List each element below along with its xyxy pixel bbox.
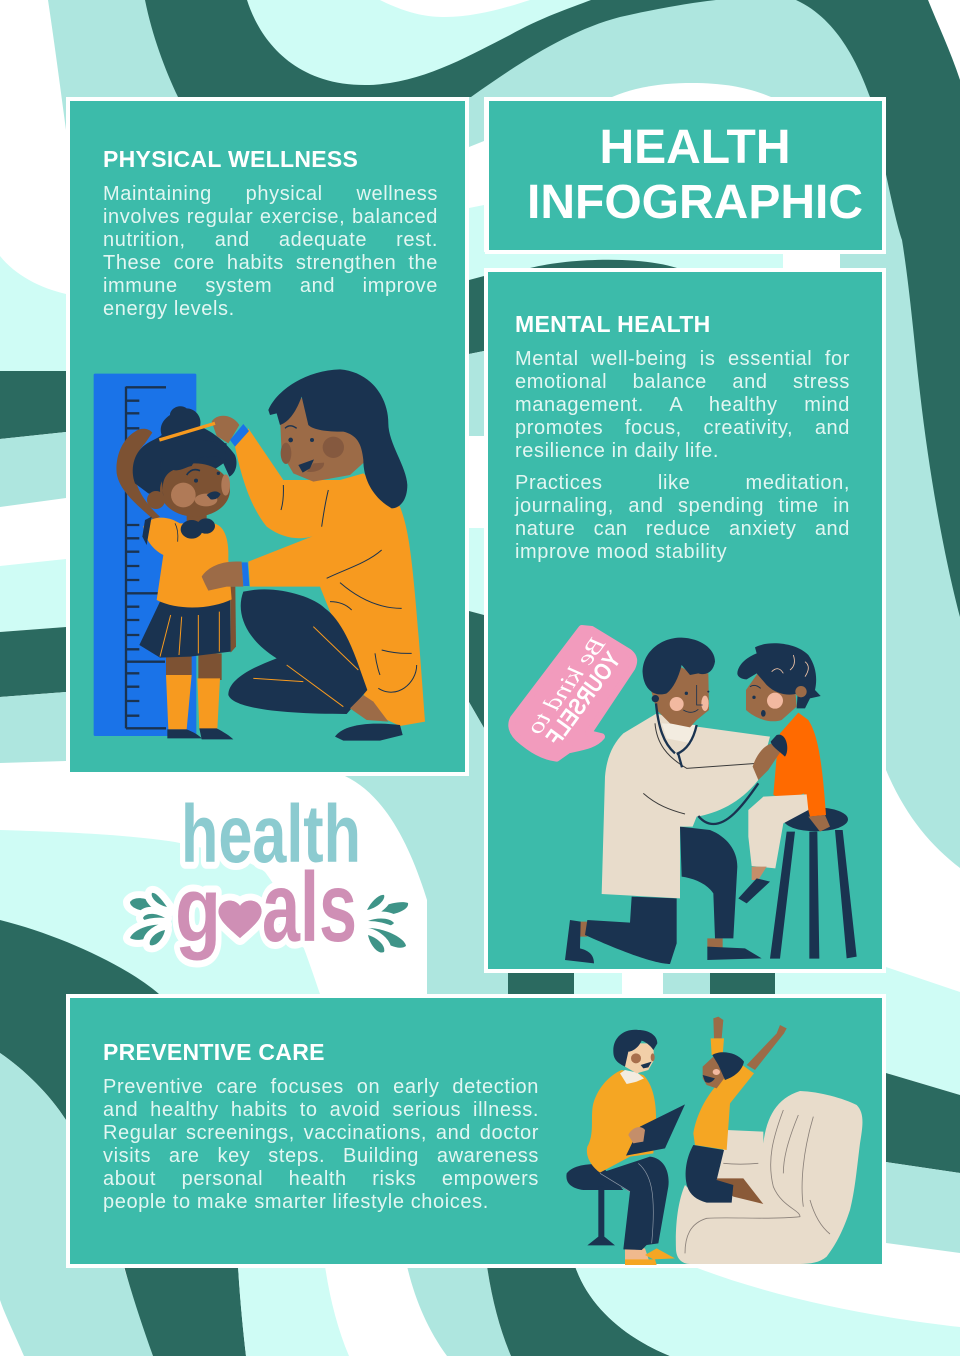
heading: preventive care: PREVENTIVE CARE	[103, 1039, 325, 1065]
panel: preventive care	[66, 994, 886, 1268]
text: physical wellness body: nutrition, and adequate rest.	[103, 229, 438, 251]
heading: physical wellness: PHYSICAL WELLNESS	[103, 146, 358, 172]
heading: mental health: MENTAL HEALTH	[515, 311, 711, 337]
text: mental health paragraph two: nature can reduce anxiety and	[515, 518, 850, 540]
text: physical wellness body: energy levels.	[103, 298, 235, 320]
text: mental health paragraph two	[514, 472, 850, 563]
speech bubble: YOURSELF	[541, 647, 627, 751]
logo: health goals	[130, 789, 408, 962]
text: mental health paragraph two: journaling, and spending time in	[515, 495, 850, 517]
panel: physical wellness	[66, 97, 469, 776]
text: preventive care body: and healthy habits to avoid serious illness.	[103, 1099, 539, 1121]
logo: health goals: health	[181, 789, 361, 880]
text: preventive care body	[103, 1076, 539, 1213]
illustration: counsellor with jumping child on a couch	[566, 1017, 862, 1265]
text: preventive care body: Regular screenings, vaccinations, and doctor	[103, 1122, 539, 1144]
text: physical wellness body: involves regular exercise, balanced	[103, 206, 438, 228]
title: HEALTH	[599, 121, 791, 174]
text: mental health paragraph one: resilience in daily life.	[515, 440, 719, 462]
text: mental health paragraph one: promotes focus, creativity, and	[515, 417, 850, 439]
text: mental health paragraph one	[515, 348, 850, 462]
illustration: doctor examining a child	[512, 628, 857, 964]
text: preventive care body: visits are key steps. Building awareness	[103, 1145, 539, 1167]
logo: health goals: g	[175, 859, 221, 961]
panel: mental health	[484, 268, 886, 973]
panel: title	[485, 97, 886, 254]
title: INFOGRAPHIC	[527, 176, 863, 229]
text: physical wellness body: immune system and improve	[103, 275, 438, 297]
text: physical wellness body	[103, 183, 438, 320]
speech bubble	[512, 628, 634, 758]
text: mental health paragraph one: management. A healthy mind	[515, 394, 850, 416]
illustration: woman measuring a child's height	[94, 369, 425, 741]
text: physical wellness body: Maintaining physical wellness	[103, 183, 438, 205]
text: preventive care body: Preventive care focuses on early detection	[103, 1076, 539, 1098]
text: mental health paragraph one: emotional balance and stress	[515, 371, 850, 393]
text: preventive care body: about personal health risks empowers	[103, 1168, 539, 1190]
text: mental health paragraph one: Mental well-being is essential for	[515, 348, 850, 370]
logo: health goals: als	[262, 852, 357, 962]
speech bubble: Be kind to	[522, 632, 611, 740]
text: physical wellness body: These core habits strengthen the	[103, 252, 438, 274]
text: preventive care body: people to make smarter lifestyle choices.	[103, 1191, 489, 1213]
title	[527, 121, 863, 229]
text: mental health paragraph two: Practices like meditation,	[515, 472, 850, 494]
text: mental health paragraph two: improve mood stability	[515, 541, 727, 563]
